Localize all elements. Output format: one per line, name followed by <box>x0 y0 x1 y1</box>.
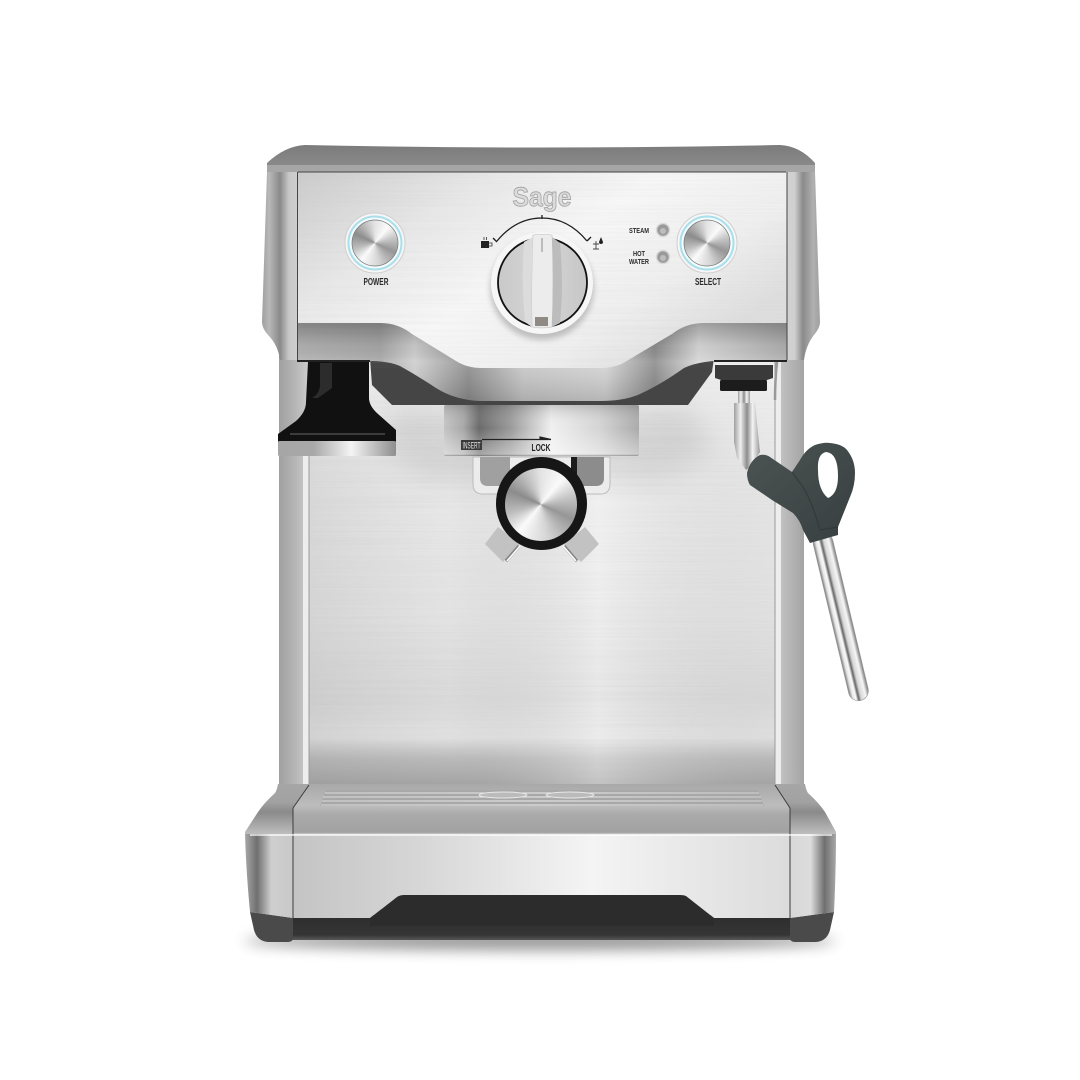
espresso machine illustration <box>244 145 869 960</box>
hot water indicator: WATER <box>629 257 649 266</box>
insert label: INSERT <box>462 440 481 450</box>
icon: coffee cup <box>481 237 492 248</box>
handle ring <box>496 457 587 550</box>
right shell <box>786 172 820 360</box>
steam indicator <box>629 224 670 236</box>
left lower body <box>245 834 293 918</box>
control panel face <box>298 172 787 368</box>
right lower body <box>790 834 836 918</box>
right column <box>775 350 804 790</box>
right shoulder top <box>775 784 836 835</box>
dial scale arc <box>493 215 591 242</box>
upper pipe <box>734 391 760 470</box>
steam indicator: STEAM <box>629 226 649 235</box>
front drawer <box>293 835 790 918</box>
select button <box>677 213 737 273</box>
body <box>279 350 804 790</box>
chrome lip <box>297 320 787 401</box>
wand lower tube <box>811 531 870 703</box>
steam wand <box>715 362 870 703</box>
lock arrow <box>482 437 551 440</box>
left foot <box>250 912 293 942</box>
ground shadow <box>244 932 836 950</box>
base <box>245 784 836 942</box>
under base shadow <box>292 915 791 940</box>
hot water indicator <box>629 249 670 266</box>
drip tray <box>293 784 790 835</box>
grip seam <box>792 472 838 530</box>
top control housing <box>262 145 820 405</box>
left shoulder top <box>245 784 309 835</box>
selector dial <box>490 232 594 340</box>
right foot <box>790 912 834 942</box>
left column <box>279 350 309 790</box>
insert label <box>461 440 482 450</box>
Sage logo: Sage <box>512 182 572 212</box>
rubber grip <box>747 443 855 543</box>
lock label: LOCK <box>532 442 551 454</box>
handle disc <box>505 468 577 541</box>
power button <box>345 213 405 273</box>
power label: POWER <box>364 277 389 288</box>
spouts <box>485 527 599 562</box>
dark underside <box>370 358 714 405</box>
portafilter <box>473 457 610 562</box>
tamper <box>278 362 396 456</box>
top cap <box>267 145 815 172</box>
left shell <box>262 172 298 360</box>
select label: SELECT <box>695 277 721 288</box>
basket <box>473 457 610 494</box>
front splash panel <box>303 360 781 785</box>
icon: steam and water <box>593 237 603 249</box>
wand mount <box>715 362 777 400</box>
group head collar <box>444 405 639 456</box>
hot water indicator: HOT <box>633 249 645 258</box>
drawer notch <box>370 895 714 926</box>
